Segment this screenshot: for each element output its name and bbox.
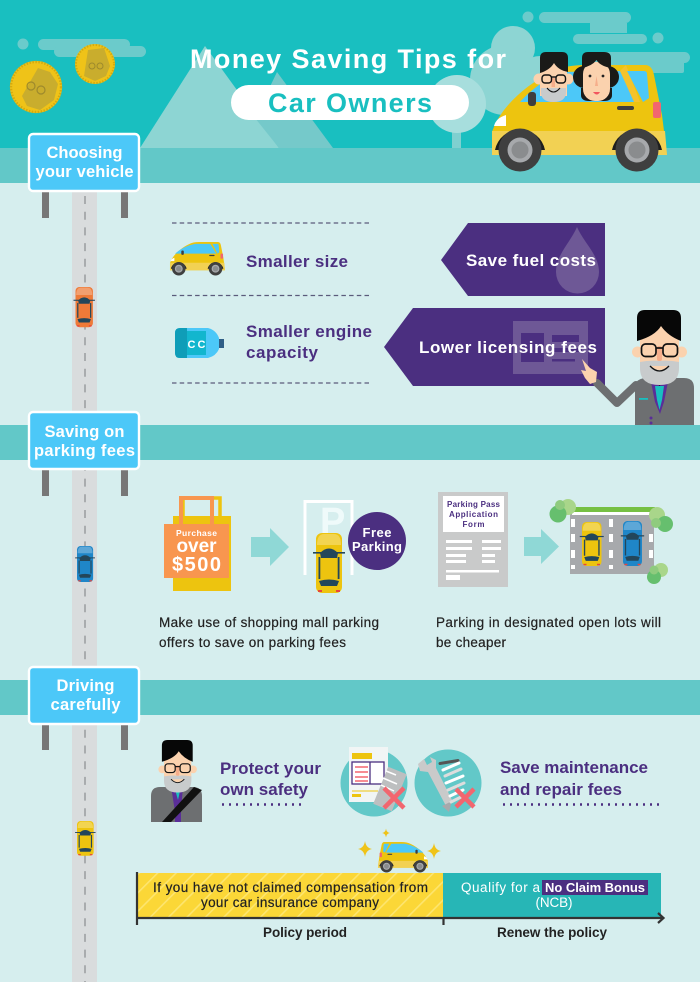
open parking lot <box>550 499 673 584</box>
shopping bag: Purchase <box>176 528 217 538</box>
sign: driving carefully <box>29 667 139 750</box>
parking pass form <box>438 492 508 587</box>
shopping bag <box>164 498 231 591</box>
text: open lots: be cheaper <box>436 635 506 650</box>
text: smaller engine capacity <box>246 322 372 362</box>
arrow <box>251 528 289 566</box>
clouds right <box>522 12 690 73</box>
icon: cc engine bottle: CC <box>188 339 206 351</box>
car with couple <box>492 52 667 172</box>
text: smaller engine capacity: Smaller engine <box>246 322 372 341</box>
clouds left <box>18 38 146 57</box>
presenter head <box>632 310 687 385</box>
woman passenger <box>573 52 619 101</box>
text: smaller size: Smaller size <box>246 252 348 271</box>
timeline <box>137 872 664 940</box>
road <box>72 185 97 982</box>
sign: choosing your vehicle <box>29 134 139 218</box>
road car blue <box>75 546 95 582</box>
renew block: Qualify for a <box>461 880 540 895</box>
text: save maintenance and repair fees: Save maintenance <box>500 758 648 777</box>
presenter man <box>581 310 694 425</box>
sign: driving carefully: carefully <box>50 696 121 714</box>
sign: saving on parking fees: Saving on <box>44 423 124 441</box>
section bands <box>0 425 700 715</box>
text: open lots: Parking in designated open lots will <box>436 615 661 630</box>
man with seatbelt <box>151 740 202 822</box>
road car orange <box>73 287 95 327</box>
free parking icon: Parking <box>352 539 402 554</box>
renew block: No Claim Bonus <box>545 880 645 895</box>
icon: cc engine bottle <box>175 328 224 358</box>
sign: choosing your vehicle: your vehicle <box>36 163 134 181</box>
text: save maintenance and repair fees: and repair fees <box>500 780 622 799</box>
free parking icon: Free <box>362 525 392 540</box>
arrow: save fuel costs <box>441 223 605 296</box>
arrow: lower licensing fees: Lower licensing fees <box>419 338 597 357</box>
bushes <box>550 499 673 584</box>
text: shopping mall offers: offers to save on parking fees <box>159 635 346 650</box>
timeline: Renew the policy <box>497 925 607 940</box>
shopping bag: $500 <box>172 554 221 576</box>
parking pass form: Form <box>462 520 484 529</box>
title pill <box>231 85 469 120</box>
text: protect your own safety <box>220 759 321 804</box>
road car yellow <box>75 821 96 856</box>
renew block <box>443 873 661 918</box>
header background <box>0 0 700 183</box>
presenter hand <box>581 359 597 384</box>
mountains <box>140 46 333 148</box>
timeline axis <box>137 872 664 925</box>
icon: bills circle <box>340 747 408 816</box>
parking pass form: Parking Pass <box>447 500 501 509</box>
sign: saving on parking fees <box>29 412 139 496</box>
parking pass form: Application <box>449 510 498 519</box>
sign: choosing your vehicle: Choosing <box>46 144 122 162</box>
icon: wrench and spring circle <box>414 750 482 816</box>
timeline: Policy period <box>263 925 347 940</box>
renew block: (NCB) <box>536 895 572 910</box>
presenter arm <box>597 383 636 403</box>
policy period block: your car insurance company <box>201 895 379 910</box>
text: protect your own safety: own safety <box>220 780 309 799</box>
sign: saving on parking fees: parking fees <box>34 442 135 460</box>
man passenger <box>534 52 574 102</box>
coin large <box>10 61 62 113</box>
text: open lots <box>436 615 661 650</box>
title pill: Car Owners <box>268 88 432 118</box>
timeline car with sparkles <box>358 829 441 872</box>
sign: driving carefully: Driving <box>56 677 114 695</box>
free parking icon: P <box>320 501 345 543</box>
text: save maintenance and repair fees <box>500 758 661 804</box>
arrow: save fuel costs: Save fuel costs <box>466 251 596 270</box>
text: shopping mall offers: Make use of shopping mall parking <box>159 615 379 630</box>
text: smaller engine capacity: capacity <box>246 343 319 362</box>
shopping bag: over <box>176 536 217 557</box>
arrow <box>524 529 559 564</box>
title: Money Saving Tips for <box>190 44 506 74</box>
trees <box>428 26 562 148</box>
free parking icon <box>305 501 406 593</box>
icon: small car <box>170 242 225 275</box>
arrow: lower licensing fees <box>384 308 605 386</box>
text: protect your own safety: Protect your <box>220 759 321 778</box>
coins <box>10 44 115 113</box>
policy period block <box>137 873 443 918</box>
text: shopping mall offers <box>159 615 379 650</box>
policy period block: If you have not claimed compensation from <box>153 880 428 895</box>
coin small <box>75 44 115 84</box>
